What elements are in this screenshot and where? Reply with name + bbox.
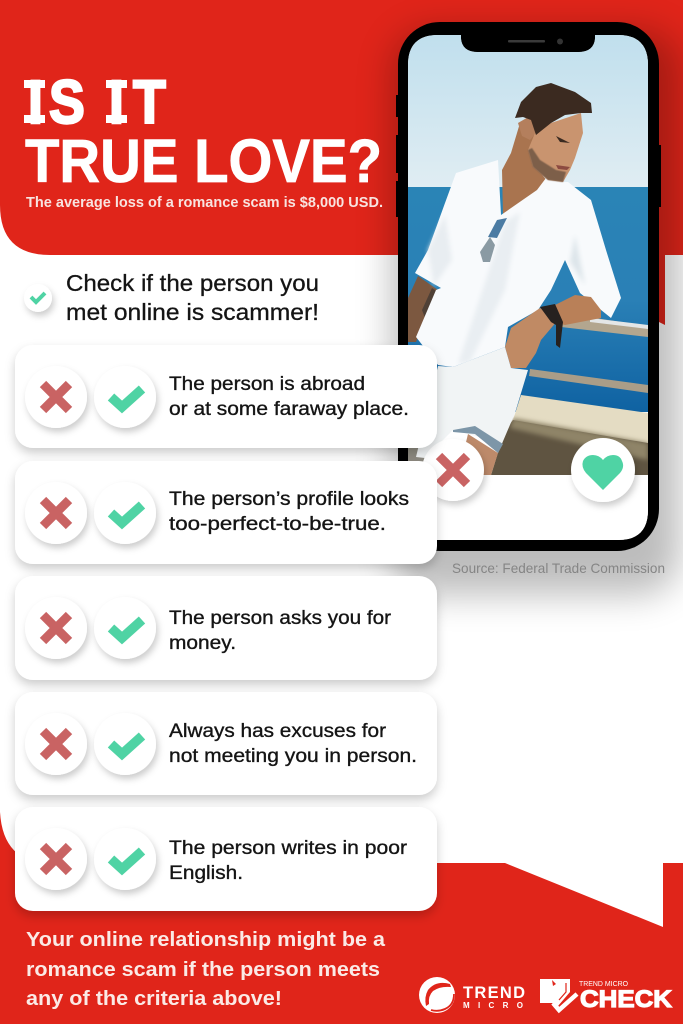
Trend Micro Check logo: TREND MICRO	[579, 981, 629, 988]
lower background strip	[408, 448, 424, 462]
no button	[25, 597, 87, 659]
Trend Micro Check logo	[540, 979, 673, 1013]
beard	[528, 148, 566, 182]
shirt folds	[458, 212, 520, 364]
shorts	[416, 347, 528, 458]
speech bubble dog icon	[540, 979, 577, 1010]
card text: or at some faraway place.	[169, 398, 409, 420]
Trend Micro logo: TREND	[463, 984, 525, 1002]
instruction text: met online is scammer!	[66, 299, 319, 325]
deck	[491, 395, 648, 475]
yes button	[94, 713, 156, 775]
closing statement: Your online relationship might be a	[26, 929, 386, 951]
title	[24, 69, 382, 195]
knee	[466, 434, 498, 475]
card text	[169, 607, 392, 654]
forearm	[555, 295, 601, 325]
red background top	[0, 0, 683, 325]
card 5	[15, 807, 437, 911]
hand	[505, 308, 558, 368]
closing statement	[26, 929, 386, 1010]
card 4	[15, 692, 437, 795]
title serifs on letter I	[24, 80, 127, 123]
card text	[169, 720, 417, 767]
eye	[556, 136, 570, 143]
card 1	[15, 345, 437, 448]
watch	[540, 304, 563, 348]
card text	[169, 837, 408, 884]
yes button	[94, 366, 156, 428]
card 3	[15, 576, 437, 680]
title: TRUE LOVE?	[25, 127, 382, 195]
no button	[25, 482, 87, 544]
phone body	[396, 22, 661, 551]
no button	[25, 366, 87, 428]
no button	[25, 828, 87, 890]
Trend Micro logo	[419, 977, 525, 1013]
upper rail	[561, 318, 648, 337]
hair	[515, 83, 592, 135]
instruction text: Check if the person you	[66, 270, 319, 296]
card text: not meeting you in person.	[169, 745, 417, 767]
mouth	[556, 165, 570, 170]
card 2	[15, 461, 437, 564]
neck	[502, 126, 546, 214]
card text	[169, 373, 409, 420]
red background bottom	[0, 812, 683, 1024]
phone screen with photo of man	[408, 35, 648, 540]
Trend Micro logo: MICRO	[463, 1001, 523, 1010]
logo mark	[419, 977, 455, 1013]
card text: Always has excuses for	[169, 720, 387, 742]
closing statement: any of the criteria above!	[26, 988, 282, 1010]
phone mockup	[396, 22, 661, 551]
yes button	[94, 597, 156, 659]
left arm	[408, 276, 438, 342]
closing statement: romance scam if the person meets	[26, 959, 380, 981]
source note: Source: Federal Trade Commission	[452, 560, 665, 576]
like button	[571, 438, 635, 502]
phone drop shadow	[392, 30, 680, 595]
card text: The person writes in poor	[169, 837, 408, 859]
check icon	[24, 284, 52, 312]
instruction text	[66, 270, 319, 325]
card text: The person asks you for	[169, 607, 392, 629]
subtitle: The average loss of a romance scam is $8,000 USD.	[26, 195, 383, 211]
ear and face	[518, 113, 583, 182]
lower rail	[529, 369, 648, 393]
title: IS IT	[28, 69, 166, 137]
card text: too-perfect-to-be-true.	[169, 513, 386, 535]
card text: English.	[169, 862, 243, 884]
sunglasses	[480, 218, 507, 262]
card text: The person’s profile looks	[169, 488, 409, 510]
card text: money.	[169, 632, 236, 654]
dislike button	[422, 439, 484, 501]
yes button	[94, 828, 156, 890]
card text: The person is abroad	[169, 373, 365, 395]
notch	[461, 33, 595, 52]
Trend Micro Check logo: CHECK	[580, 986, 673, 1013]
card text	[169, 488, 409, 535]
no button	[25, 713, 87, 775]
yes button	[94, 482, 156, 544]
shirt torso and sleeves	[415, 160, 621, 367]
